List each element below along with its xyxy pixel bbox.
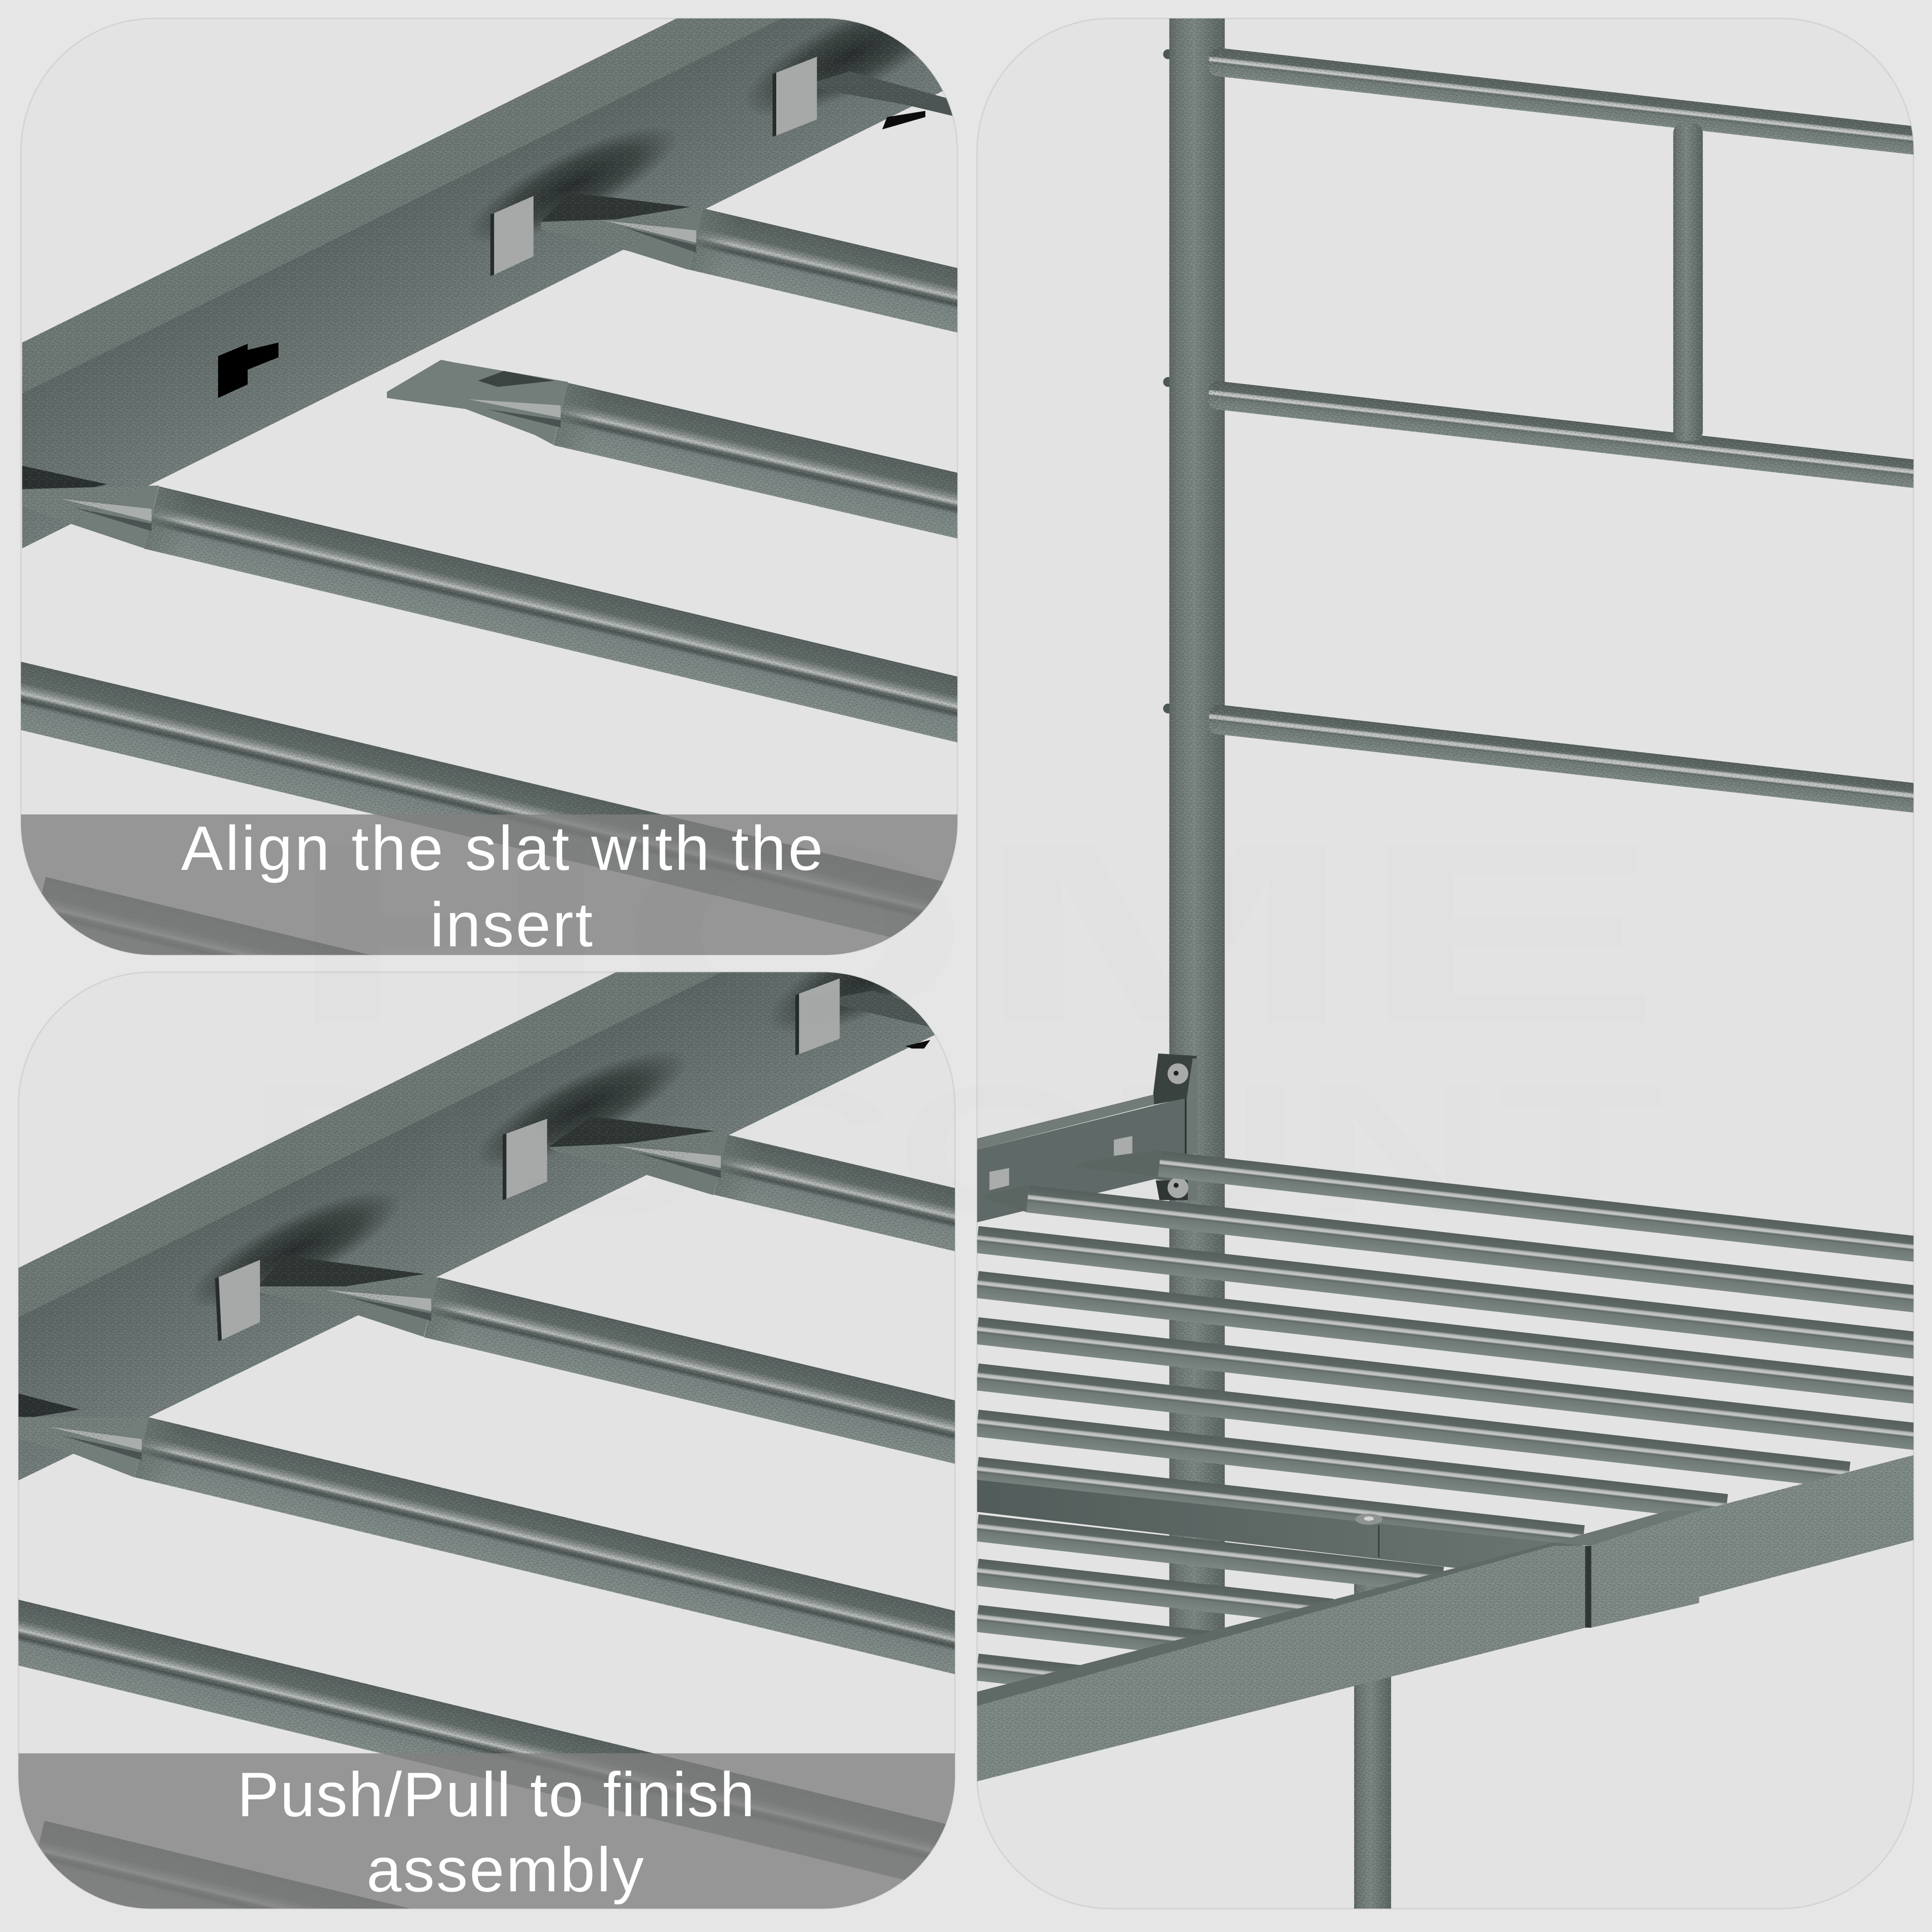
caption band	[21, 814, 957, 960]
caption text: assembly	[367, 1835, 644, 1905]
bed frame headboard	[1170, 12, 1932, 1663]
watermark	[246, 788, 1663, 1253]
caption text	[181, 824, 820, 947]
panel: push/pull to finish assembly	[0, 889, 1088, 1932]
caption band	[18, 1753, 955, 1908]
centre support rail	[977, 1480, 1555, 1568]
caption text	[237, 1760, 755, 1905]
icon: rail insert plates	[215, 978, 930, 1341]
icon: small post screws	[1163, 49, 1173, 714]
caption text: Push/Pull to finish	[237, 1760, 755, 1830]
icon: bracket bolts and plates	[990, 1063, 1188, 1198]
icon: black insert slot	[218, 343, 279, 398]
front side rail with sleeve	[977, 1455, 1914, 1781]
lower slats	[975, 1514, 1444, 1694]
bed rail with slats	[0, 889, 1088, 1932]
sleeve seam	[1585, 1546, 1591, 1628]
caption text: Align the slat with the	[181, 814, 823, 884]
side rail and bracket	[977, 1054, 1198, 1222]
bed rail with slats	[21, 18, 957, 955]
caption text: insert	[430, 890, 592, 960]
panel: align the slat with the insert	[20, 18, 958, 956]
icon: centre rail bolt	[1355, 1514, 1382, 1558]
leg	[1354, 1577, 1391, 1910]
slats	[975, 1150, 1932, 1552]
icon: rail insert plates	[490, 57, 925, 276]
